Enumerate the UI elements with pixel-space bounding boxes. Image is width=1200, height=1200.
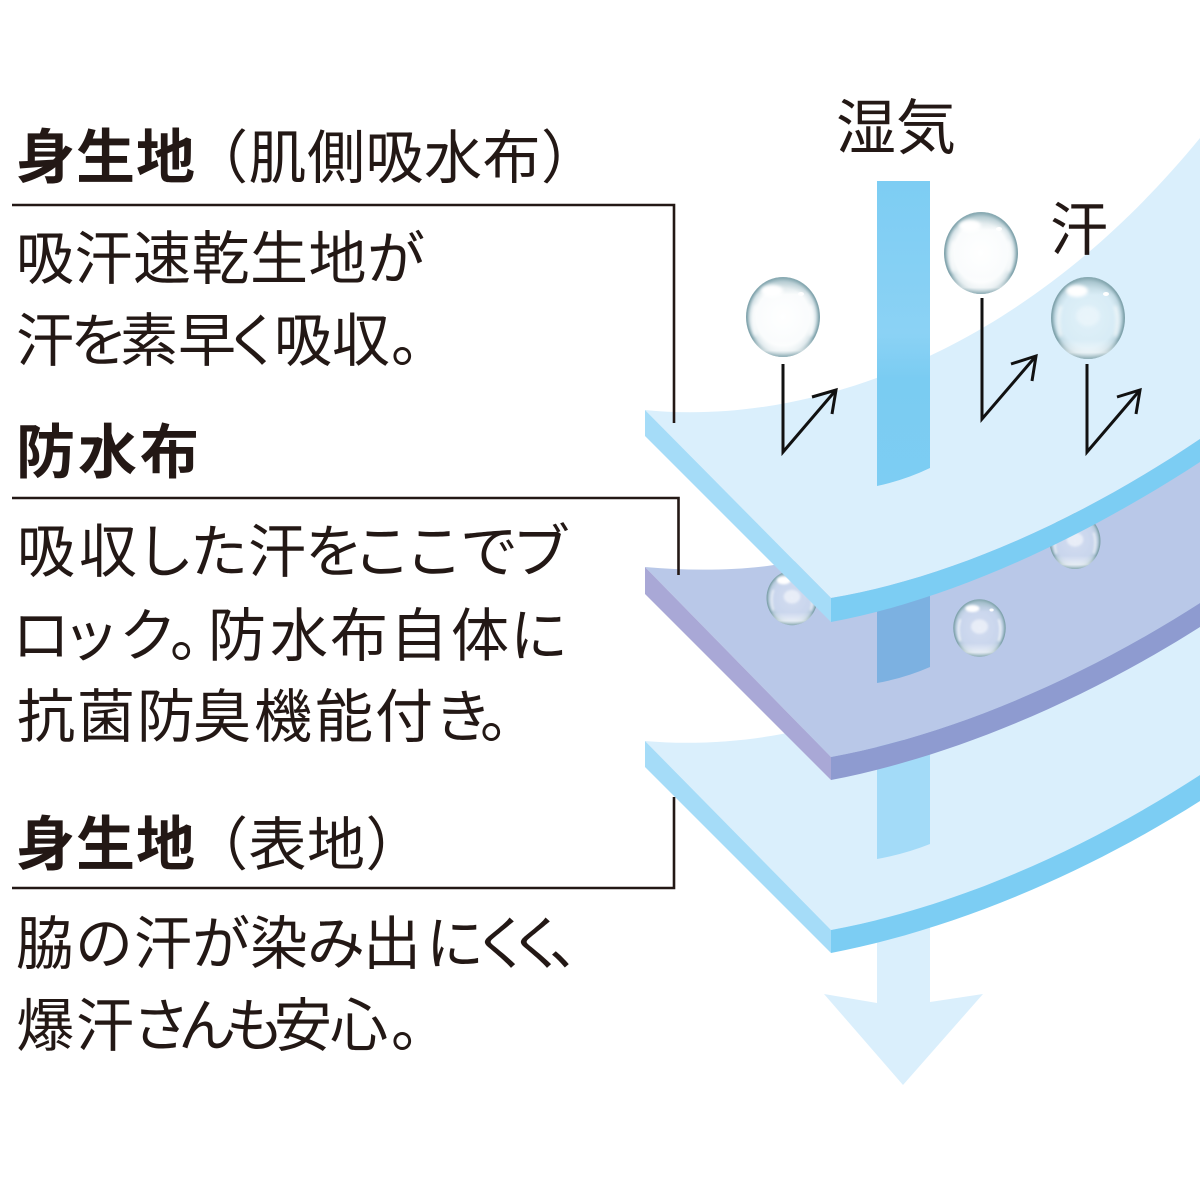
text: outer fabric description: 爆汗さんも安心。 — [16, 994, 449, 1059]
heading: inner fabric: （肌側吸水布） — [190, 126, 600, 191]
droplet: sweat left — [746, 277, 820, 357]
layer: outer fabric — [645, 500, 1200, 953]
heading: outer fabric: （表地） — [190, 813, 424, 878]
layer: waterproof fabric — [645, 300, 1200, 780]
label: sweat: 汗 — [1050, 198, 1108, 263]
heading: inner fabric: 身生地 — [16, 125, 196, 191]
arrow: sweat centre — [982, 298, 1036, 419]
moisture bar: through inner fabric — [877, 181, 930, 486]
text: waterproof fabric description: 抗菌防臭機能付き。 — [17, 685, 538, 750]
text: outer fabric description — [16, 912, 607, 1059]
droplet: blocked centre — [953, 599, 1006, 657]
moisture bar: through waterproof fabric — [877, 590, 930, 683]
text: waterproof fabric description: ロック。防水布自体に — [12, 604, 568, 669]
text: outer fabric description: 脇の汗が染み出にくく、 — [16, 912, 607, 977]
leader line: waterproof fabric — [12, 498, 678, 575]
droplet: blocked right — [1049, 513, 1101, 569]
moisture bar: through outer fabric — [877, 740, 930, 859]
droplet: sweat centre — [944, 212, 1018, 294]
droplet: blocked left — [766, 571, 818, 625]
text: inner fabric description — [16, 227, 449, 374]
heading: outer fabric: 身生地 — [16, 812, 196, 878]
droplet: sweat right — [1051, 277, 1125, 359]
arrow: sweat left — [783, 364, 836, 452]
text: waterproof fabric description: 吸収した汗をここでブ — [17, 520, 570, 585]
layer: inner skin-side fabric — [645, 138, 1200, 622]
leader line: inner fabric — [12, 205, 674, 423]
text: waterproof fabric description — [12, 520, 570, 750]
heading: waterproof fabric: 防水布 — [16, 420, 202, 486]
text: inner fabric description: 吸汗速乾生地が — [16, 227, 426, 292]
leader line: outer fabric — [12, 797, 674, 888]
arrow: sweat right — [1087, 364, 1140, 452]
text: inner fabric description: 汗を素早く吸収。 — [16, 309, 449, 374]
label: moisture: 湿気 — [836, 95, 956, 162]
arrow: moisture passing out — [824, 900, 983, 1085]
